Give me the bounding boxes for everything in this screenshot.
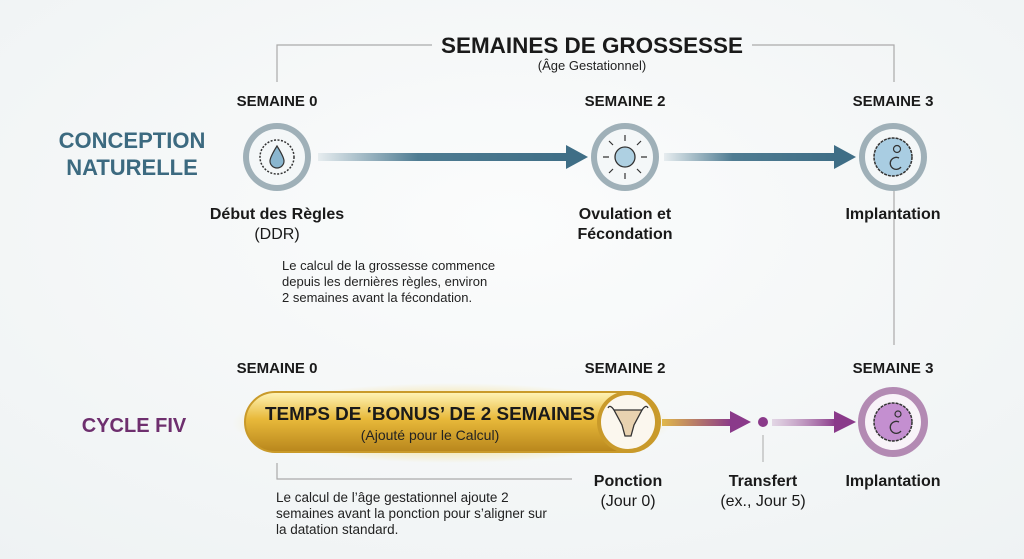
labels: natural: Fécondation — [577, 226, 673, 243]
title: (Âge Gestationnel) — [538, 58, 646, 73]
icon: drop — [243, 123, 311, 191]
labels: natural: Implantation — [845, 206, 941, 223]
labels: natural: (DDR) — [254, 226, 300, 243]
labels: natural: Début des Règles — [210, 206, 344, 223]
labels: natural — [210, 206, 941, 243]
arrow: fiv 2 — [772, 411, 856, 433]
labels: fiv: Transfert — [729, 473, 798, 490]
week labels top: SEMAINE 0 — [237, 93, 317, 110]
labels: fiv: Implantation — [845, 473, 941, 490]
week labels bottom: SEMAINE 0 — [237, 360, 317, 377]
icon: embryo — [859, 123, 927, 191]
note: fiv — [276, 490, 547, 537]
title — [441, 33, 743, 73]
heading: conception naturelle: CONCEPTION — [59, 128, 205, 153]
note: natural: depuis les dernières règles, environ — [282, 274, 487, 289]
heading: conception naturelle: NATURELLE — [66, 155, 198, 180]
note: natural: 2 semaines avant la fécondation. — [282, 290, 472, 305]
labels: fiv — [594, 473, 941, 510]
week labels bottom: SEMAINE 2 — [585, 360, 665, 377]
note: fiv: la datation standard. — [276, 522, 398, 537]
arrow: natural 1 — [318, 145, 588, 169]
arrow: fiv 1 — [662, 411, 751, 433]
gold bonus bar — [232, 383, 672, 463]
heading: cycle FIV: CYCLE FIV — [82, 415, 187, 437]
week labels top — [237, 93, 933, 110]
gold bonus bar: TEMPS DE ‘BONUS’ DE 2 SEMAINES — [265, 404, 595, 424]
labels: fiv: (Jour 0) — [600, 493, 656, 510]
heading: conception naturelle — [59, 128, 205, 180]
labels: natural: Ovulation et — [579, 206, 672, 223]
week labels bottom: SEMAINE 3 — [853, 360, 933, 377]
gold bonus bar: (Ajouté pour le Calcul) — [361, 427, 499, 443]
note: natural: Le calcul de la grossesse commence — [282, 258, 495, 273]
arrow: natural 2 — [664, 145, 856, 169]
title: SEMAINES DE GROSSESSE — [441, 33, 743, 58]
icon: embryo purple — [858, 387, 928, 457]
week labels top: SEMAINE 3 — [853, 93, 933, 110]
dot: transfert — [758, 417, 768, 462]
labels: fiv: Ponction — [594, 473, 662, 490]
note: fiv: semaines avant la ponction pour s’aligner sur — [276, 506, 547, 521]
labels: fiv: (ex., Jour 5) — [720, 493, 806, 510]
note: natural — [282, 258, 495, 305]
note: fiv: Le calcul de l’âge gestationnel ajoute 2 — [276, 490, 509, 505]
week labels bottom — [237, 360, 933, 377]
icon: uterus — [597, 391, 659, 453]
week labels top: SEMAINE 2 — [585, 93, 665, 110]
icon: ovulation — [591, 123, 659, 191]
